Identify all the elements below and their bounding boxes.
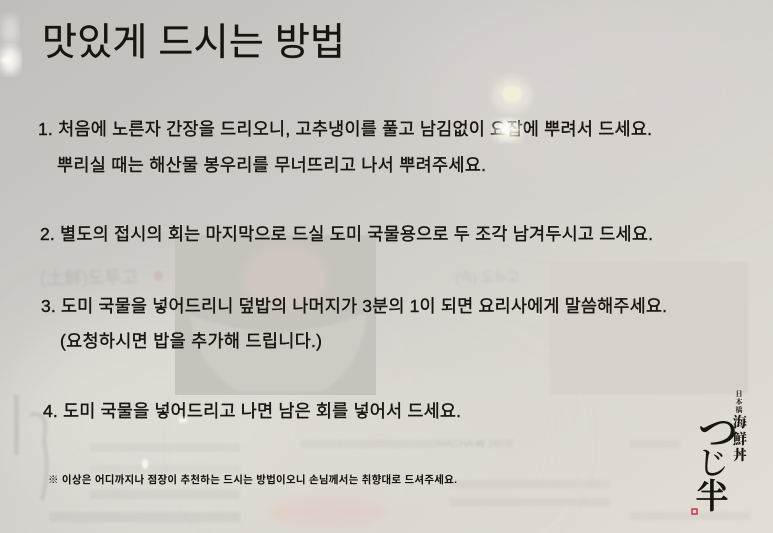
logo main mark: つじ半 [695, 401, 738, 518]
step 3 second line: (요청하시면 밥을 추가해 드립니다.) [60, 331, 322, 351]
logo small text: 日本橋: 橋 [736, 405, 742, 415]
step 2: 2. 별도의 접시의 회는 마지막으로 드실 도미 국물용으로 두 조각 남겨두시고 드세요. [40, 224, 653, 244]
step 1 [38, 119, 652, 175]
logo: restaurant brand [692, 389, 747, 518]
footnote: ※ 이상은 어디까지나 점장이 추천하는 드시는 방법이오니 손님께서는 취향대로 드셔주세요. [48, 473, 457, 486]
logo small text: 日本橋: 本 [736, 397, 742, 407]
step 1 second line: 뿌리실 때는 해산물 봉우리를 무너뜨리고 나서 뿌려주세요. [57, 155, 486, 175]
logo small text: 日本橋: 日 [736, 389, 742, 399]
show-through menu text: UMACHA ₩ 280원 [430, 438, 514, 450]
title: 맛있게 드시는 방법 [42, 22, 345, 64]
logo text: 海鮮丼: 鮮 [733, 429, 747, 449]
step 1 first line: 1. 처음에 노른자 간장을 드리오니, 고추냉이를 풀고 남김없이 요잡에 뿌려서 드세요. [38, 119, 652, 139]
logo main mark: つじ半: 半 [695, 469, 729, 518]
logo text: 海鮮丼: 海 [733, 412, 747, 432]
logo text: 海鮮丼: 丼 [733, 445, 747, 465]
show-through menu text [14, 268, 750, 522]
step 3 first line: 3. 도미 국물을 넣어드리니 덮밥의 나머지가 3분의 1이 되면 요리사에게 말씀해주세요. [41, 296, 667, 316]
logo small text: 日本橋 [736, 389, 742, 415]
show-through menu photo [175, 235, 748, 395]
logo red seal [692, 509, 697, 514]
logo main mark: つじ半: じ [697, 438, 729, 484]
glare highlights [0, 16, 532, 469]
step 4: 4. 도미 국물을 넣어드리고 나면 남은 회를 넣어서 드세요. [43, 401, 461, 421]
logo main mark: つじ半: つ [698, 401, 738, 458]
show-through menu text: (土鮮)도투고 [40, 268, 138, 288]
show-through menu text: (속) 도뉴고 [455, 269, 520, 285]
logo text: 海鮮丼 [733, 412, 747, 465]
step 3 [41, 296, 667, 351]
